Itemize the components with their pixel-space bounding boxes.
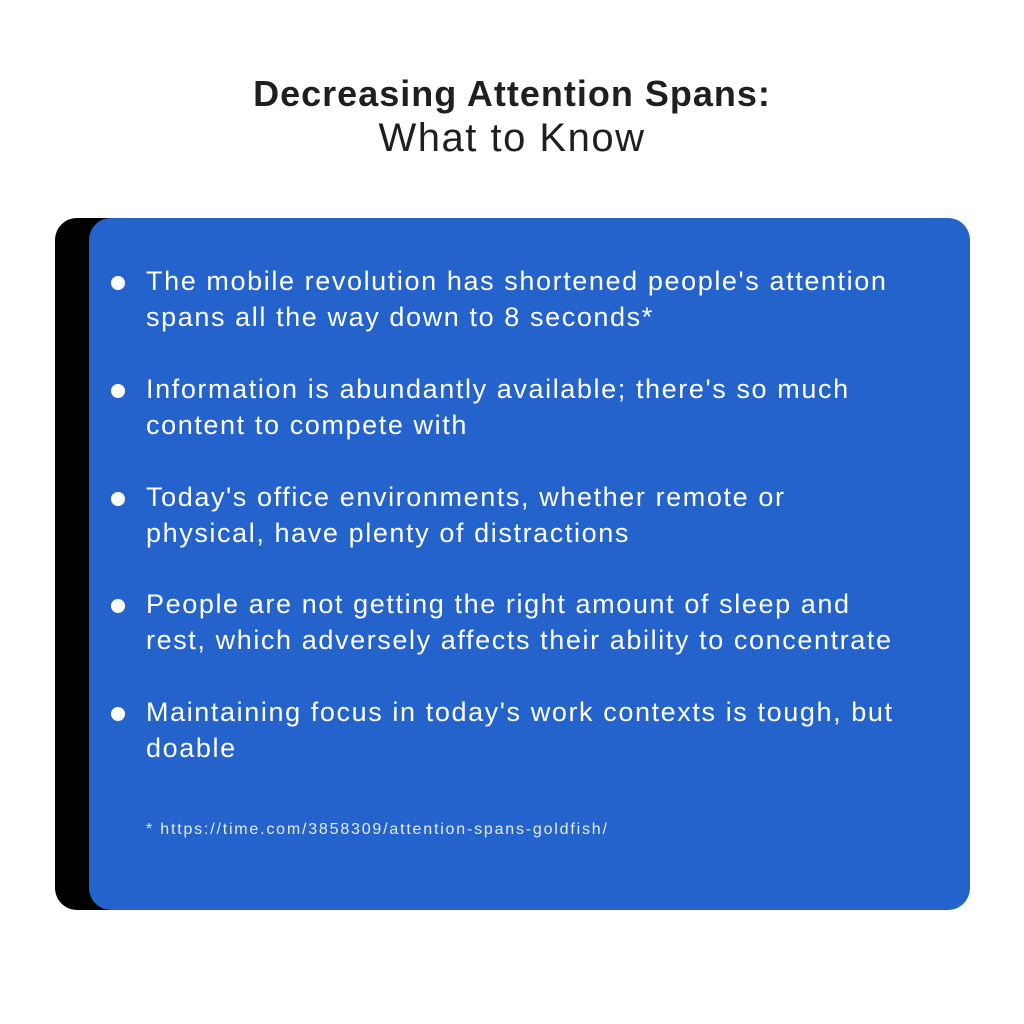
bullet 5: doable	[146, 733, 237, 763]
bullet 1: spans all the way down to 8 seconds*	[146, 302, 654, 332]
footnote: * https://time.com/3858309/attention-spans-goldfish/	[146, 821, 609, 838]
title: Decreasing Attention Spans:	[253, 73, 771, 114]
bullet 2	[111, 374, 850, 440]
title: What to Know	[378, 116, 646, 160]
panel: bullet list	[89, 218, 970, 910]
bullet 4	[111, 589, 893, 655]
bullet 5: Maintaining focus in today's work contexts is tough, but	[146, 697, 894, 727]
bullet 2: content to compete with	[146, 410, 468, 440]
bullet 1	[111, 266, 887, 332]
panel shadow	[55, 218, 915, 910]
bullet 5	[111, 697, 894, 763]
bullet 2: Information is abundantly available; there's so much	[146, 374, 850, 404]
bullet 1: The mobile revolution has shortened people's attention	[146, 266, 887, 296]
title	[253, 73, 771, 160]
bullet 4: rest, which adversely affects their ability to concentrate	[146, 625, 893, 655]
bullet 3: physical, have plenty of distractions	[146, 518, 630, 548]
bullet 3: Today's office environments, whether remote or	[146, 482, 786, 512]
bullet 4: People are not getting the right amount of sleep and	[146, 589, 851, 619]
bullet 3	[111, 482, 786, 548]
